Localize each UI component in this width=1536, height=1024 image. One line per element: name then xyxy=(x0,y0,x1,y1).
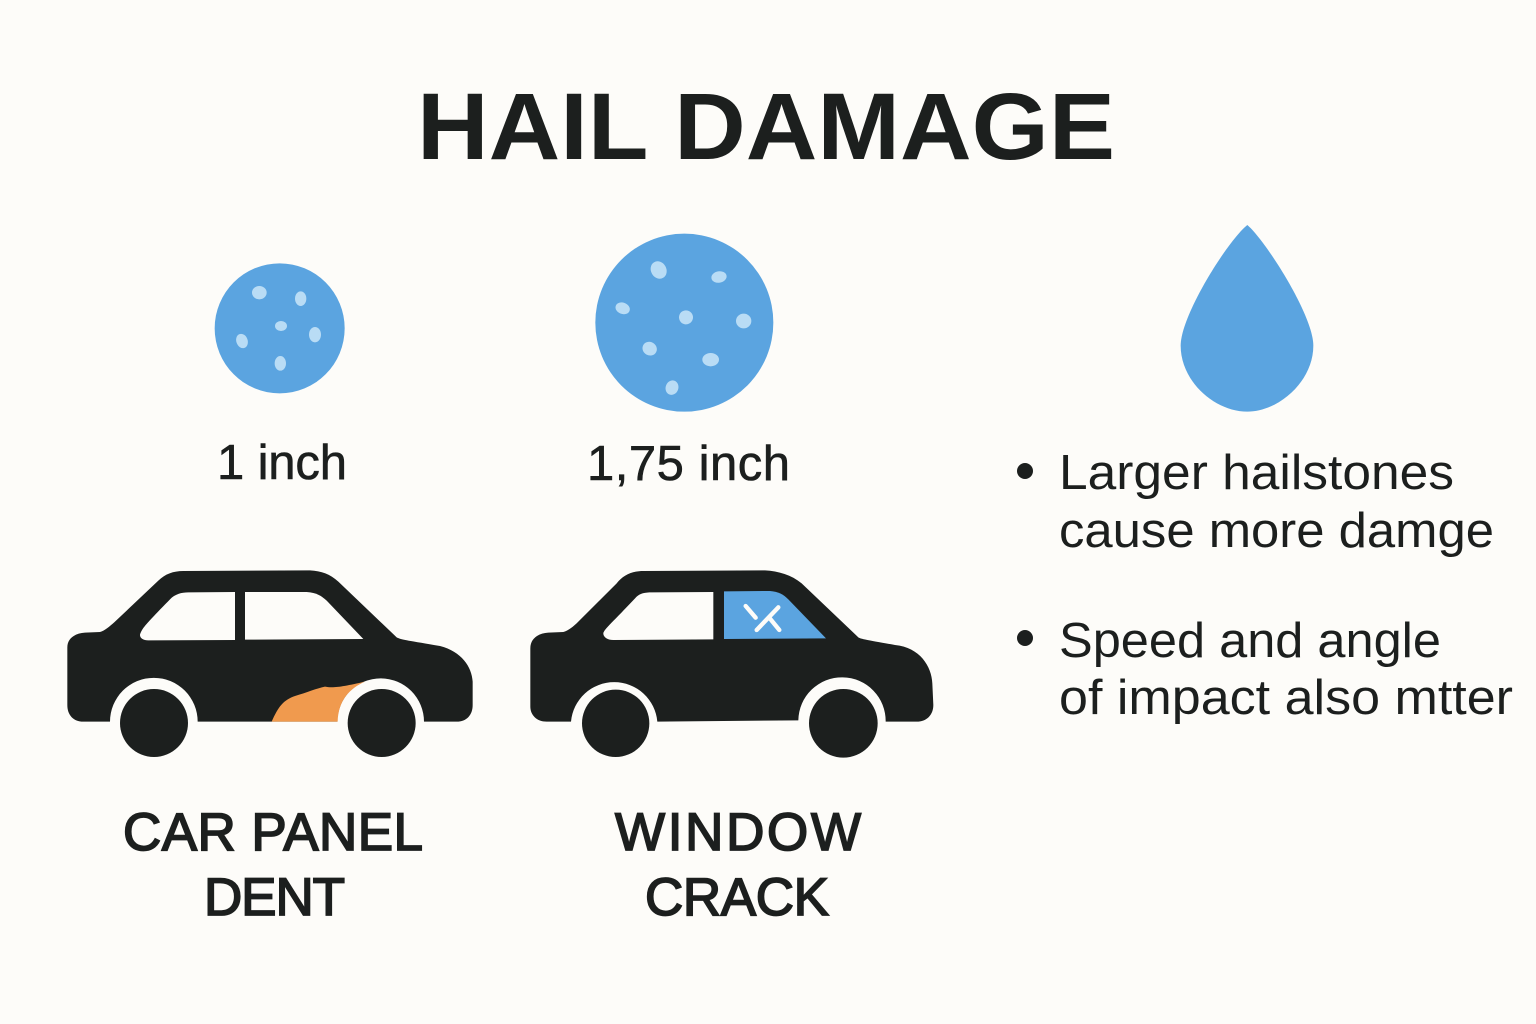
bullet: larger hailstones: cause more damge xyxy=(1059,504,1494,558)
label: car panel dent: DENT xyxy=(204,868,345,927)
title: HAIL DAMAGE xyxy=(417,74,1115,180)
front wheel xyxy=(120,689,188,757)
bullet: larger hailstones xyxy=(1017,446,1494,558)
label: 1,75 inch: 1,75 inch xyxy=(587,437,790,491)
rear wheel xyxy=(348,689,416,757)
bullet: larger hailstones: Larger hailstones xyxy=(1059,446,1454,500)
bullet: speed and angle: Speed and angle xyxy=(1059,614,1441,668)
cracked window xyxy=(724,591,826,639)
label: car panel dent xyxy=(123,803,423,927)
icon: 1 inch hailstone xyxy=(215,263,345,393)
label: 1 inch: 1 inch xyxy=(217,436,347,490)
icon: car with panel dent xyxy=(67,570,473,757)
label: car panel dent: CAR PANEL xyxy=(123,803,423,862)
dent xyxy=(272,682,365,722)
label: window crack: WINDOW xyxy=(615,803,861,862)
bullet list xyxy=(1017,446,1513,725)
rear wheel xyxy=(809,689,878,758)
bullet: speed and angle: of impact also mtter xyxy=(1059,671,1513,725)
label: window crack: CRACK xyxy=(645,868,829,927)
label: window crack xyxy=(615,803,861,927)
icon: water drop xyxy=(1181,225,1313,412)
icon: 1.75 inch hailstone xyxy=(595,234,773,412)
left window xyxy=(140,592,235,640)
bullet: speed and angle xyxy=(1017,614,1513,725)
right window xyxy=(245,592,363,640)
icon: car with window crack xyxy=(530,570,933,758)
left window xyxy=(603,592,713,640)
front wheel xyxy=(582,690,649,757)
crack mark xyxy=(746,606,779,630)
